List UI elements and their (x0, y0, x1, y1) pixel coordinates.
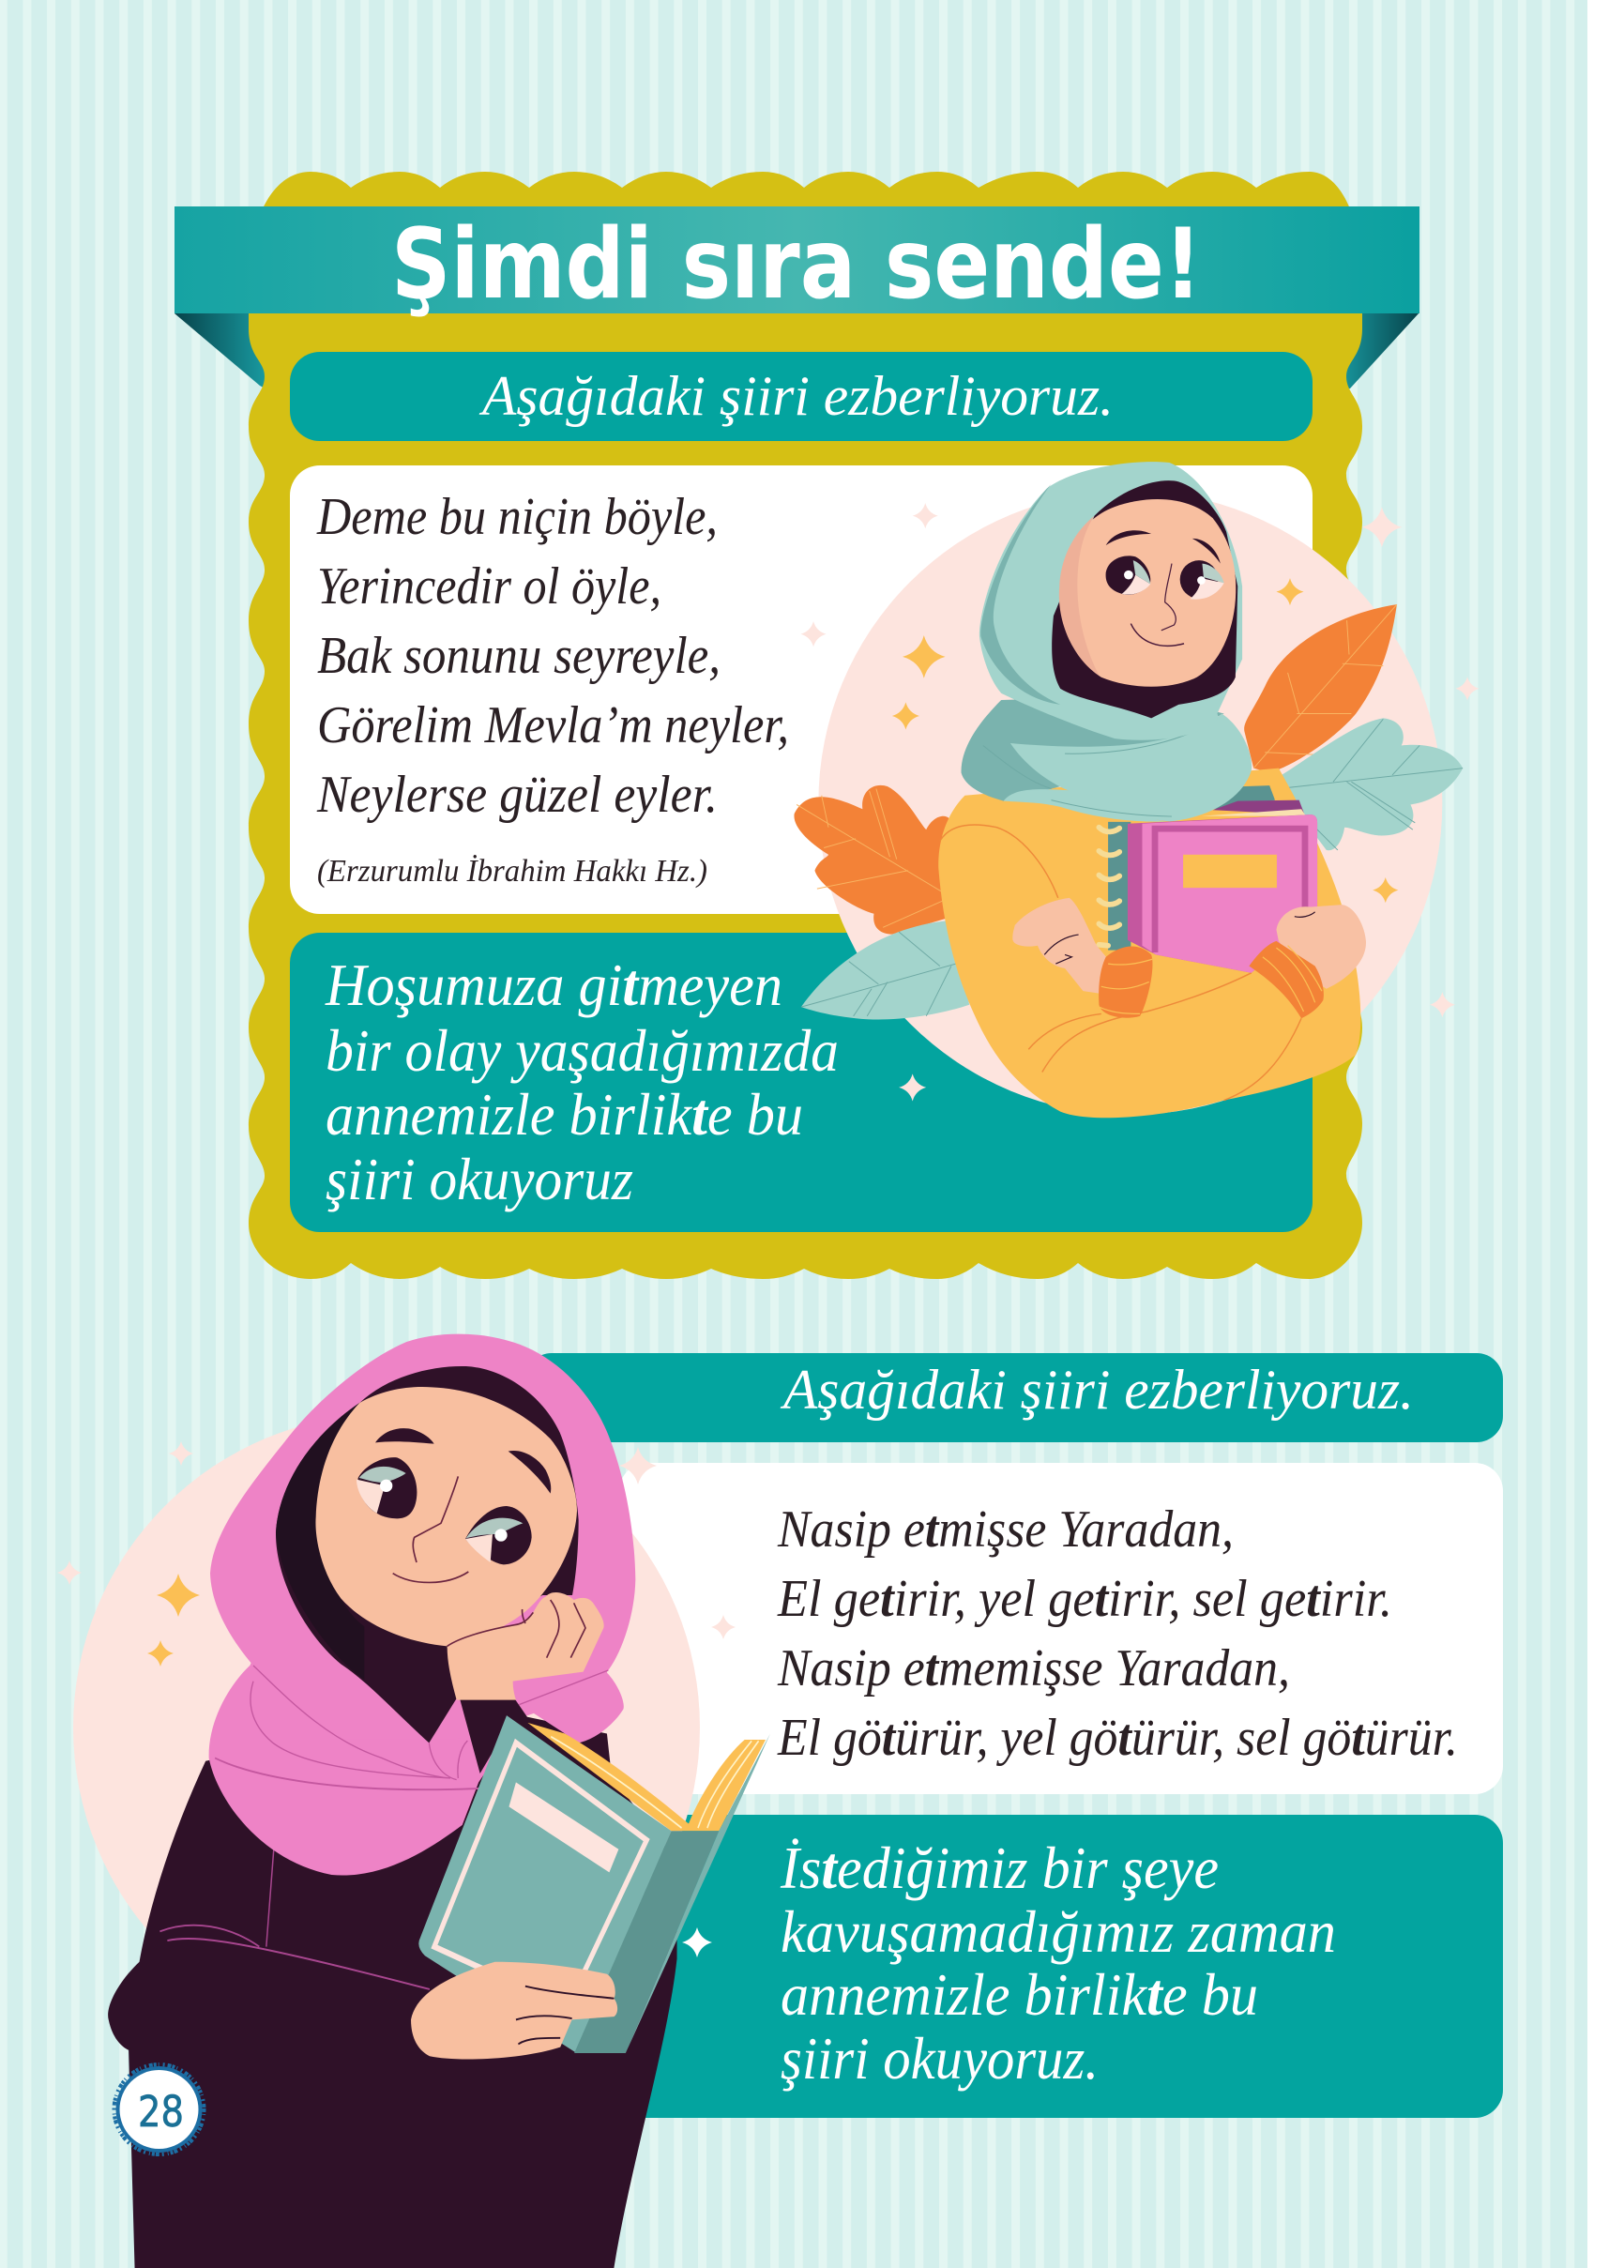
instruction pill (525, 1353, 1503, 1442)
poem text: Bak sonunu seyreyle, (317, 627, 721, 685)
hair and collar (276, 1366, 579, 1773)
advice text: şiiri okuyoruz (326, 1146, 633, 1212)
bottom poem text: Nasip etmemişse Yaradan, (777, 1639, 1290, 1697)
panel: bottom activity card (525, 1353, 1503, 2118)
illustration: girl with teal hijab holding books (794, 462, 1480, 1118)
bottom advice text: şiiri okuyoruz. (781, 2025, 1099, 2092)
instruction text: Aşağıdaki şiiri ezberliyoruz. (780, 1359, 1414, 1421)
head and hood (210, 1334, 635, 1780)
hand under chin (448, 1592, 604, 1700)
title ribbon (175, 206, 1419, 313)
face (315, 1387, 577, 1646)
bottom advice text: kavuşamadığımız zaman (781, 1898, 1336, 1965)
poem text: Görelim Mevla’m neyler, (317, 696, 789, 754)
instruction text: Aşağıdaki şiiri ezberliyoruz. (478, 365, 1114, 427)
bottom advice text: İstediğimiz bir şeye (780, 1834, 1219, 1901)
yellow sweater (938, 769, 1360, 1118)
ribbon fold left (175, 313, 272, 392)
bottom poem text: El getirir, yel getirir, sel getirir. (777, 1570, 1392, 1628)
instruction pill (290, 352, 1313, 441)
poem text (316, 488, 789, 889)
open book and holding hand (411, 1715, 770, 2060)
background circle (73, 1414, 700, 2041)
bottom advice text: annemizle birlikte bu (781, 1961, 1258, 2028)
advice text: bir olay yaşadığımızda (326, 1017, 839, 1084)
bottom advice text (780, 1834, 1336, 2092)
scarf wrap (962, 695, 1252, 822)
teal advice box (290, 933, 1313, 1232)
figure (108, 1334, 770, 2268)
poem text: Yerincedir ol öyle, (317, 557, 661, 616)
illustration: girl with pink hijab reading a book (57, 1334, 770, 2268)
advice box (563, 1815, 1503, 2118)
hand holding book (411, 1962, 617, 2060)
advice text (325, 951, 839, 1212)
bottom poem text (777, 1500, 1458, 1767)
page number badge (114, 2064, 205, 2154)
ribbon fold right (1332, 312, 1419, 394)
hood (979, 462, 1242, 740)
advice text: Hoşumuza gitmeyen (325, 951, 782, 1018)
panel: top activity card (175, 172, 1419, 1279)
poem box (290, 465, 1313, 914)
right eye (465, 1506, 532, 1564)
bottom poem text: El götürür, yel götürür, sel götürür. (777, 1709, 1458, 1767)
sparkles (57, 1441, 736, 1957)
eyebrows (375, 1428, 551, 1494)
background circle (818, 491, 1442, 1115)
left eye (357, 1457, 417, 1518)
left hand (1012, 898, 1108, 994)
poem box (619, 1463, 1503, 1794)
dark dress (108, 1703, 677, 2268)
right hand (1276, 905, 1366, 989)
orange oak leaf left (794, 785, 949, 935)
hair (1052, 480, 1237, 718)
advice text: annemizle birlikte bu (326, 1081, 803, 1148)
right cuff (1249, 941, 1324, 1018)
pink hood (210, 1334, 635, 1739)
open book (418, 1715, 770, 2053)
sparkles (800, 503, 1480, 1101)
page number badge: 28 (138, 2087, 184, 2137)
left cuff (1099, 946, 1152, 1018)
face (1059, 499, 1236, 687)
nose and smile (393, 1476, 468, 1582)
title: Şimdi sıra sende! (391, 208, 1202, 321)
orange leaf right (1244, 604, 1397, 773)
scarf fold lines (250, 1666, 608, 1780)
poem text: Deme bu niçin böyle, (316, 488, 718, 546)
teal leaf right (1269, 718, 1463, 850)
teal leaf left (801, 921, 969, 1020)
poem text: (Erzurumlu İbrahim Hakkı Hz.) (317, 854, 707, 889)
poem text: Neylerse güzel eyler. (316, 766, 718, 824)
bottom poem text: Nasip etmişse Yaradan, (777, 1500, 1234, 1559)
stacked books (1108, 785, 1317, 973)
notebook spiral (1099, 828, 1119, 946)
pink scarf (209, 1606, 624, 1876)
scalloped yellow frame (249, 172, 1362, 1279)
